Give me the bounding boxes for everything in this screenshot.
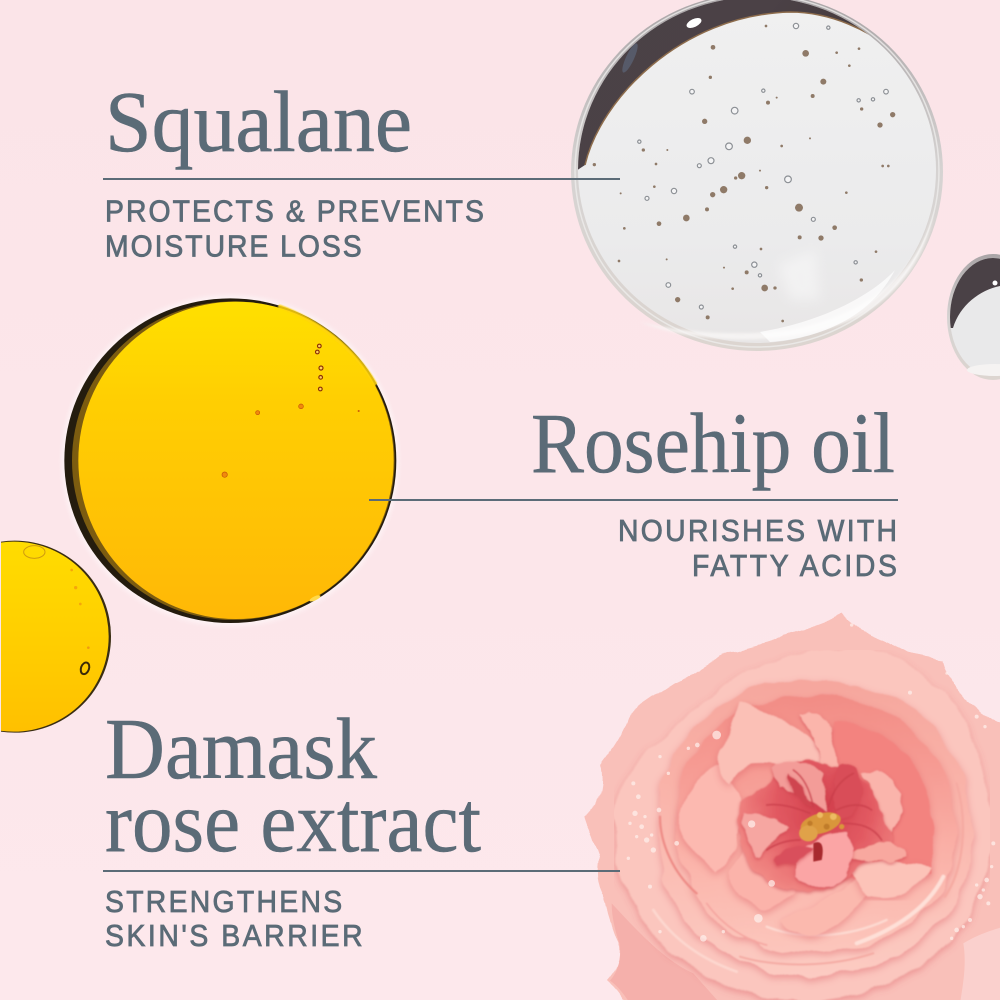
- droplet: small rosehip oil: [0, 541, 111, 733]
- text: Damask rose benefit: STRENGTHENS: [105, 885, 342, 919]
- rose lower fold highlights: [653, 783, 963, 972]
- rose core petals: [743, 762, 908, 887]
- heading: Damask rose extract: Damask: [105, 700, 377, 797]
- droplet: large rosehip oil: [62, 295, 399, 626]
- heading: Damask rose extract: [105, 700, 481, 870]
- rose corner petal: [960, 927, 1000, 1000]
- rose petal ring one: [614, 650, 990, 1000]
- leader line: Rosehip oil: [369, 499, 898, 501]
- rose petal ring three: [677, 695, 957, 953]
- rose stamens: [798, 808, 844, 841]
- leader line: Damask rose extract: [103, 870, 620, 872]
- rose petal rings and folds: [614, 650, 990, 1000]
- rose lower right petal: [847, 860, 930, 895]
- text: Squalane benefit: MOISTURE LOSS: [105, 230, 362, 264]
- rose left petal: [680, 767, 742, 875]
- text: Rosehip oil benefit: FATTY ACIDS: [692, 549, 897, 583]
- rose inner core: [739, 761, 893, 891]
- rose upper center petal: [797, 713, 838, 797]
- rose upper-left petal: [716, 703, 825, 797]
- rose right outer petal: [827, 723, 933, 880]
- rose lower-left shade petal: [610, 903, 720, 1000]
- rose lower-left inner petal: [728, 840, 795, 911]
- text: Damask rose benefit: SKIN'S BARRIER: [105, 919, 363, 953]
- text: Squalane benefit: [105, 195, 484, 264]
- rose lower center petal: [780, 867, 870, 934]
- text: Rosehip oil benefit: NOURISHES WITH: [618, 514, 897, 548]
- leader line: Squalane: [103, 178, 620, 180]
- oil bubbles: [222, 404, 359, 477]
- text: Damask rose benefit: [105, 885, 363, 953]
- rose: [583, 613, 1000, 1000]
- rose dew drops: [627, 623, 995, 942]
- droplet bubbles: [638, 23, 888, 309]
- text: Rosehip oil benefit: [618, 514, 897, 583]
- rose right inner petal: [862, 771, 901, 835]
- text: Squalane benefit: PROTECTS & PREVENTS: [105, 195, 484, 229]
- heading: Damask rose extract: rose extract: [105, 773, 481, 870]
- heading: Squalane: Squalane: [105, 73, 412, 170]
- rose outer silhouette: [583, 613, 1000, 1000]
- heading: Rosehip oil: Rosehip oil: [531, 395, 895, 491]
- droplet: clear squalane: [560, 0, 960, 351]
- rose core streaks: [767, 770, 882, 850]
- rose dark crevice: [813, 842, 823, 862]
- droplet specks: [593, 25, 895, 322]
- rose petal ring two: [657, 679, 972, 977]
- droplet: small clear at edge: [945, 250, 1000, 380]
